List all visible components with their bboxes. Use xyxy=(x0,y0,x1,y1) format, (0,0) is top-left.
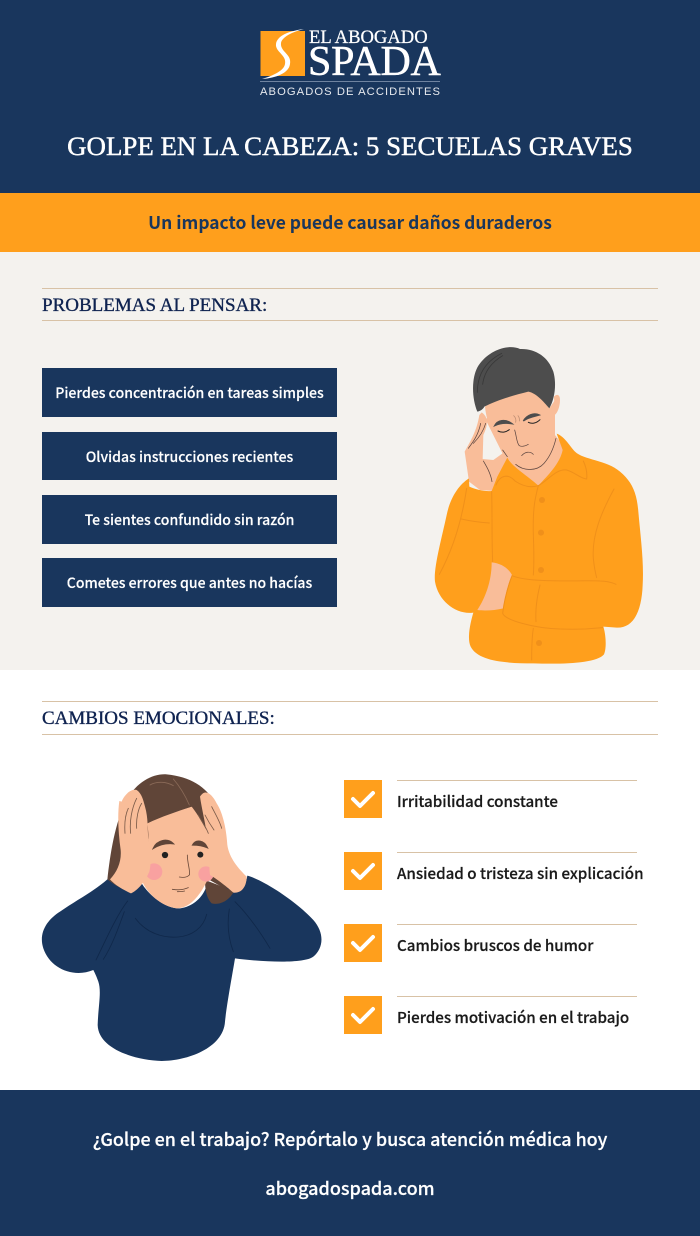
man's facial lines xyxy=(468,414,556,482)
checklist item: motivacion xyxy=(344,996,637,1034)
checklist item: irritabilidad xyxy=(344,780,637,818)
illustration: woman holding her head xyxy=(42,774,322,1061)
orange subtitle banner: Un impacto leve puede causar daños duraderos xyxy=(148,210,552,235)
logo text: spada: SPADA xyxy=(308,39,441,85)
woman's sweater xyxy=(42,876,321,1061)
man's face xyxy=(485,391,555,470)
heading: problemas al pensar: PROBLEMAS AL PENSAR: xyxy=(42,295,267,316)
man's hair xyxy=(473,347,555,412)
man's shirt seams xyxy=(439,461,616,660)
check icon xyxy=(344,780,382,818)
woman's right hand xyxy=(200,792,247,893)
woman's cheeks xyxy=(146,863,214,882)
check icon xyxy=(344,924,382,962)
logo mark xyxy=(260,29,305,79)
list item: concentracion xyxy=(42,368,337,417)
logo tagline: ABOGADOS DE ACCIDENTES xyxy=(260,86,441,98)
item text: Pierdes motivación en el trabajo xyxy=(397,1006,629,1028)
heading: cambios emocionales: CAMBIOS EMOCIONALES: xyxy=(42,708,275,729)
logo xyxy=(260,27,441,98)
orange subtitle banner xyxy=(0,193,700,252)
woman's lower hair xyxy=(205,880,234,904)
man's shirt buttons xyxy=(536,497,545,646)
woman's left hand xyxy=(110,790,151,893)
man's ear xyxy=(554,395,560,415)
list item: confundido xyxy=(42,495,337,544)
checklist item: ansiedad xyxy=(344,852,644,890)
logo text: el abogado: EL ABOGADO xyxy=(309,27,428,48)
list item: concentracion: Pierdes concentración en tareas simples xyxy=(55,383,324,403)
woman's back hair xyxy=(107,774,233,895)
item text: Cambios bruscos de humor xyxy=(397,934,593,956)
list item: errores: Cometes errores que antes no hacías xyxy=(67,573,312,593)
check icon xyxy=(344,852,382,890)
woman's face xyxy=(142,807,211,908)
check icon xyxy=(344,996,382,1034)
man's hand and neck xyxy=(465,412,564,492)
man's shirt xyxy=(435,434,643,664)
woman's sweater lines xyxy=(96,901,270,960)
title: GOLPE EN LA CABEZA: 5 SECUELAS GRAVES xyxy=(67,131,633,161)
item text: Irritabilidad constante xyxy=(397,790,558,812)
logo rule xyxy=(260,81,440,82)
panel: problemas al pensar xyxy=(0,252,700,670)
illustration: man holding his head xyxy=(434,347,643,664)
item text: Ansiedad o tristeza sin explicación xyxy=(397,862,644,884)
footer call to action: ¿Golpe en el trabajo? Repórtalo y busca atención médica hoy xyxy=(93,1126,607,1152)
footer website: abogadospada.com xyxy=(265,1175,435,1201)
list item: instrucciones: Olvidas instrucciones recientes xyxy=(86,447,293,467)
woman's finger lines xyxy=(125,779,222,833)
footer band xyxy=(0,1090,700,1236)
list item: confundido: Te sientes confundido sin razón xyxy=(85,510,294,530)
list item: errores xyxy=(42,558,337,607)
woman's front hair xyxy=(140,778,212,823)
checklist item: humor xyxy=(344,924,637,962)
list item: instrucciones xyxy=(42,432,337,480)
woman's facial features xyxy=(153,840,207,892)
header band xyxy=(0,0,700,193)
